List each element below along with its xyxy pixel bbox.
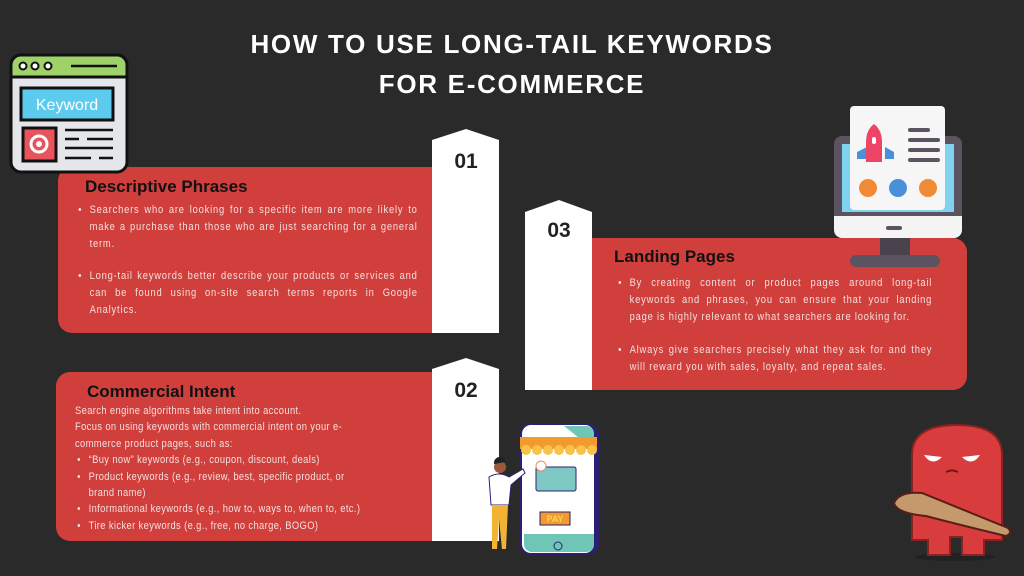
text: commercial intent: Focus on using keywords with commercial intent on your e-commerce product pages, such as:	[75, 421, 342, 450]
tab: 02	[432, 358, 499, 541]
text: landing pages	[618, 277, 932, 373]
text: commercial intent	[75, 405, 360, 532]
text: descriptive phrases: Long-tail keywords better describe your products or services and can be found using on-site search terms reports in Google Analytics.	[90, 270, 418, 316]
text: landing pages: By creating content or product pages around long-tail keywords and phrases, you can ensure that your landing page is highly relevant to what searchers are looking for.	[630, 277, 932, 323]
illustration: red monster with club	[893, 424, 1011, 561]
text: commercial intent: Product keywords (e.g., review, best, specific product, or brand name)	[89, 471, 345, 499]
text: landing pages: Always give searchers precisely what they ask for and they will reward you with sales, loyalty, and repeat sales.	[630, 344, 932, 373]
title	[250, 29, 774, 99]
illustration: shopper with phone	[488, 423, 599, 555]
text: commercial intent: Search engine algorithms take intent into account.	[75, 405, 302, 417]
text: descriptive phrases	[78, 204, 418, 316]
illustration: shopper with phone: PAY	[546, 514, 564, 524]
heading: landing pages: Landing Pages	[614, 247, 735, 266]
tab: 01	[432, 129, 499, 333]
text: commercial intent: Tire kicker keywords (e.g., free, no charge, BOGO)	[89, 520, 318, 532]
icon: keyword browser: Keyword	[36, 97, 98, 114]
text: descriptive phrases: Searchers who are looking for a specific item are more likely to make a purchase than those who are just searching for a general term.	[90, 204, 418, 250]
title: HOW TO USE LONG-TAIL KEYWORDS	[250, 29, 774, 59]
tab: 03: 03	[547, 219, 571, 242]
panel: landing pages	[592, 238, 967, 390]
panel: commercial intent	[56, 372, 433, 541]
panel: descriptive phrases	[58, 167, 433, 333]
heading: descriptive phrases: Descriptive Phrases	[85, 177, 248, 196]
tab: 02: 02	[454, 379, 478, 402]
heading: commercial intent: Commercial Intent	[87, 382, 235, 401]
text: commercial intent: Informational keywords (e.g., how to, ways to, when to, etc.)	[89, 503, 360, 515]
tab: 03	[525, 200, 592, 390]
title: FOR E-COMMERCE	[379, 69, 645, 99]
icon: keyword browser	[10, 54, 128, 174]
tab: 01: 01	[454, 150, 478, 173]
text: commercial intent: “Buy now” keywords (e.g., coupon, discount, deals)	[89, 454, 320, 466]
icon: monitor landing page	[834, 106, 962, 267]
